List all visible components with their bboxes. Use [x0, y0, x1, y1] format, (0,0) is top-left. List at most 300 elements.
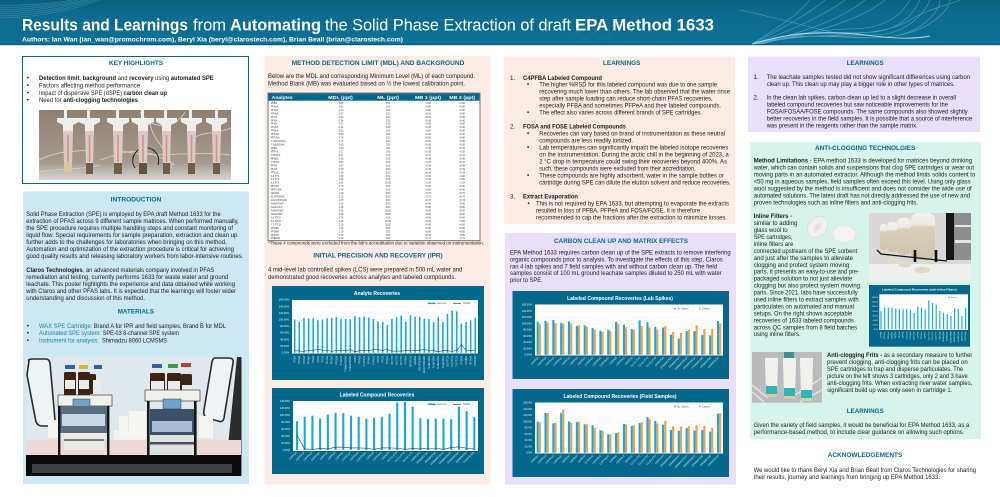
text: anti-clogging frits: prevent clogging, anti-clogging frits can be placed on [827, 359, 968, 366]
table: MDL results: <0.80 [425, 144, 432, 146]
table: MDL results: 5.00 [386, 197, 391, 199]
chart: analyte recoveries: NFDHA [470, 356, 472, 365]
chart: inline filter recoveries: 0.00% [873, 329, 879, 331]
chart: inline filter recoveries: C2-8:2 FTS [936, 332, 938, 340]
table: MDL results: 2.00 [386, 235, 391, 237]
chart: analyte recoveries: PFDA [321, 356, 324, 363]
chart: inline filter recoveries: D3NMeFOSAA [949, 331, 952, 343]
learning 2: FOSA and FOSE: • [527, 131, 529, 138]
table: MDL results: <0.76 [459, 192, 466, 195]
table: MDL results: <0.40 [459, 119, 466, 122]
chart: labeled compound recoveries: 60.00% [281, 427, 291, 431]
highlights list [27, 75, 214, 104]
materials list: Instrument for analysis: [39, 338, 99, 345]
table: MDL results: 1.70 [339, 193, 344, 195]
chart: analyte recoveries: PFMPA [460, 356, 463, 364]
chart: analyte recoveries: 6:2 FTS [396, 356, 398, 365]
chart: labeled compound recoveries: C3PFHxS [373, 451, 383, 462]
materials list: • [27, 338, 29, 345]
table: MDL results: 10.00 [385, 183, 392, 185]
learning 2: FOSA and FOSE: 2 °C drop in temperature could swing their recoveries beyond 400%. As [539, 159, 727, 166]
table: MDL results: MB 2 (ppt) [449, 95, 476, 100]
chart: labeled compound recoveries: C4PFHpA [311, 451, 321, 462]
chart: analyte recoveries: 11Cl-PF3OUdS [423, 356, 426, 373]
table: MDL results: <0.39 [459, 171, 466, 174]
table: MDL results: <0.80 [425, 227, 432, 230]
chart: analyte recoveries: T-PFHxS [363, 356, 366, 366]
heading: learnings: LEARNINGS [847, 60, 884, 67]
chart: labeled compound recoveries: D3NMeFOSA [416, 451, 429, 465]
table: MDL results: 0.75 [339, 235, 344, 237]
chart: labeled compound recoveries: C2-4:2 FTS [387, 451, 398, 463]
table: MDL results: <4.00 [425, 223, 432, 226]
chart: labeled compound recoveries: C5PFPeA [295, 451, 306, 462]
chart: field samples: 140.0% [523, 407, 533, 411]
table: MDL results: 2.00 [386, 162, 391, 164]
table: MDL results: PFDS [271, 169, 278, 171]
materials list: SPE-03 8-channel SPE system [103, 330, 179, 337]
chart: analyte recoveries: 60.00% [280, 331, 290, 335]
text: inline filters: setups. On the right shows acceptable [754, 310, 853, 317]
chart: labeled compound recoveries: 40.00% [281, 434, 291, 438]
table: MDL results: 1.88 [339, 179, 344, 181]
learning 3: extract evaporation: recommended to cap the fractions after the extraction to minimize losses. [536, 215, 727, 222]
chart: analyte recoveries: 120.00% [279, 311, 290, 315]
chart: field samples: D7NMeFOSE [691, 454, 704, 468]
learning 2: FOSA and FOSE: 2. [510, 124, 515, 131]
table: MDL results: <0.80 [425, 123, 432, 126]
table: MDL results: <0.40 [459, 185, 466, 188]
chart: lab spikes: 160.00% [522, 303, 533, 307]
text: introduction paragraph 1: further adds to the challenges for laboratories when bringing on this method. [26, 239, 227, 246]
table: MDL results: 0.75 [339, 186, 344, 188]
table: MDL results: <0.39 [459, 168, 466, 171]
chart: inline filter recoveries: C8PFOS [925, 332, 927, 338]
chart: inline filter recoveries: C2-6:2 FTS [932, 332, 934, 340]
table: MDL results: PFPeS [271, 152, 279, 154]
materials list: Shimadzu 8060 LCMSMS [102, 338, 167, 345]
table: MDL results: 5.00 [386, 179, 391, 181]
chart: analyte recoveries: 3:3 FTCA [446, 356, 449, 367]
chart: analyte recoveries: 7:3 FTCA [456, 356, 459, 367]
chart: field samples: D5NEtFOSAA [683, 454, 696, 468]
chart: analyte recoveries: PFTrDA [335, 356, 338, 365]
materials list: • [27, 330, 29, 337]
chart: lab spikes: C2-6:2 FTS [638, 356, 649, 368]
table: MDL results: MB 1 (ppt) [415, 95, 442, 100]
heading: MDL: METHOD DETECTION LIMIT (MDL) AND BACKGROUND [292, 60, 465, 67]
text: method limitations: proven technologies such as inline filters and anti-clogging frits. [754, 200, 918, 207]
learning 1: C4PFBA: The effect also varies across different brands of SPE cartridges. [539, 110, 702, 117]
table: MDL results: <0.80 [459, 216, 466, 219]
chart: labeled compound recoveries: Labeled Compound Recoveries [340, 392, 415, 398]
table: MDL results: 0.79 [339, 138, 344, 140]
highlights list: • [27, 75, 29, 82]
learning 3: extract evaporation: • [528, 201, 530, 208]
table: MDL results: 2.00 [386, 141, 391, 143]
table: MDL results: 0.29 [339, 169, 344, 171]
chart: field samples: D3NMeFOSAA [674, 454, 689, 469]
table: MDL results: <0.80 [459, 130, 466, 133]
title: the Solid Phase Extraction of draft [325, 17, 572, 35]
table: MDL results: <0.80 [459, 227, 466, 230]
learning 2: FOSA and FOSE: FOSA and FOSE Labeled Compounds [523, 124, 627, 131]
heading: IPR: INITIAL PRECISION AND RECOVERY (IPR) [313, 253, 443, 260]
chart: lab spikes: C4PFBA [530, 356, 540, 366]
chart: labeled compound recoveries: C7PFUnA [342, 451, 352, 462]
chart: inline filter recoveries: 100.00% [872, 306, 879, 308]
table: MDL results: <0.37 [425, 154, 432, 157]
chart: analyte recoveries: Analyte Recoveries [354, 291, 400, 297]
chart: analyte recoveries: Recovery [437, 302, 448, 305]
table: MDL results: NFDHA [271, 234, 279, 237]
learning item 2: FOSA/FOSAA/FOSE compounds. The same compounds also showed slightly [767, 108, 969, 115]
table: MDL results: <0.80 [459, 230, 466, 233]
table: MDL results: 10.00 [385, 221, 392, 223]
table: MDL results: 1.52 [339, 176, 344, 178]
chart: labeled compound recoveries: D5NEtFOSAA [439, 451, 452, 465]
table: MDL results: <0.38 [425, 164, 432, 167]
chart: analyte recoveries: PFOA [312, 356, 315, 363]
table: MDL results: <8.00 [425, 210, 432, 212]
chart: labeled compound recoveries: %RSD [463, 403, 470, 406]
table: MDL results: PFTeDA [271, 137, 280, 140]
table: MDL results: 11Cl-PF3OUdS [271, 200, 287, 202]
chart: analyte recoveries: T-PFOS [372, 356, 375, 365]
chart: field samples: Labeled Compound Recoveries (Field Samples) [563, 394, 677, 400]
table: MDL results: <4.00 [425, 220, 432, 223]
chart: lab spikes: D3NMeFOSA [660, 356, 673, 370]
table: MDL results: PFHpS [271, 158, 279, 160]
highlights list: Factors affecting method performance [39, 82, 141, 90]
table: MDL results: ML (ppt) [377, 95, 400, 100]
chart: analyte recoveries: PFHxA [303, 356, 306, 364]
table: MDL results: <0.76 [459, 199, 466, 202]
chart: inline filter recoveries: Recovery [951, 296, 958, 299]
panel: carbon clean up and matrix effects [505, 233, 736, 484]
learning item 2 [754, 94, 973, 129]
chart: field samples: 40.0% [525, 438, 533, 442]
table: MDL results: 1.18 [339, 231, 344, 233]
learning 1: C4PFBA: step after sample loading can reduce short-chain PFAS recoveries, [539, 96, 713, 103]
table: MDL results: <0.80 [459, 234, 466, 237]
text: inline filters: clogging and protect system moving [754, 262, 850, 269]
chart: analyte recoveries: 160.00% [279, 298, 290, 302]
panel: key highlights [22, 56, 248, 184]
table: MDL results: N-EtFOSE* [271, 213, 283, 216]
heading: materials: MATERIALS [118, 309, 155, 316]
materials list: • [27, 323, 29, 330]
text: IPR description: 4 mid-level lab controlled spikes (LCS) were prepared in 500 mL water and [268, 267, 463, 274]
chart: labeled compound recoveries: C2PFTeDA [356, 451, 367, 463]
text: introduction paragraph 1: liquid flow. Special requirements for sample preparation, extraction and clean up [26, 232, 238, 239]
chart: inline filter recoveries: C4PFHpA [890, 331, 894, 339]
table: MDL results: <0.80 [425, 202, 432, 206]
chart: analyte recoveries: 5:3 FTCA [451, 356, 454, 367]
highlights list: Detection limit, background and recovery using automated SPE [39, 75, 214, 82]
panel: introduction and materials [23, 192, 249, 484]
heading: key highlights: KEY HIGHLIGHTS [109, 60, 164, 67]
table: MDL results: 5.00 [386, 190, 391, 192]
table: MDL results: 2.00 [386, 148, 391, 150]
chart: field samples: D3NMeFOSA [660, 454, 673, 468]
text: introduction paragraph 2: remediation and testing, currently performs 1633 for waste water and ground [26, 274, 229, 281]
learning 1: C4PFBA: C4PFBA Labeled Compound [523, 75, 602, 82]
table: MDL results: <0.80 [459, 137, 466, 140]
chart: labeled compound recoveries: C4PFBA [289, 451, 298, 461]
chart: lab spikes: C4PFHpA [553, 356, 563, 367]
chart: analyte recoveries: PFBS [354, 356, 357, 363]
table: MDL results: 1.87 [339, 200, 344, 202]
chart: field samples: 160.0% [523, 401, 533, 405]
chart: labeled compound recoveries: D9NEtFOSE [455, 451, 468, 464]
text: method limitations: <50 mg in aqueous samples, field samples often exceed this level. Using only glass [754, 179, 971, 186]
chart: analyte recoveries: 140.00% [279, 304, 290, 308]
learning 3: extract evaporation: This is not required by EPA 1633, but attempting to evaporate the extracts [536, 201, 729, 208]
chart: labeled compound recoveries: C8PFOA [319, 451, 329, 461]
table: MDL results: 5.00 [386, 200, 391, 202]
chart: labeled compound recoveries: C9PFNA [327, 451, 337, 461]
table: MDL results: 4:2 FTS [271, 176, 280, 178]
chart: field samples: C4PFBA [530, 454, 540, 464]
table: MDL results: 20.00 [385, 210, 392, 212]
table: MDL results: 5.00 [386, 207, 391, 209]
highlights list: Need for anti-clogging technologies [39, 97, 139, 104]
text: anti-clogging frits: Anti-clogging Frits - as a secondary measure to further [827, 352, 972, 359]
chart: analyte recoveries: T-NEtFOSAA [349, 356, 352, 371]
chart: labeled compound recoveries: C6PFDA [335, 451, 344, 461]
table: MDL results: <0.80 [425, 109, 432, 112]
table: MDL results: 5.42 [339, 210, 344, 212]
text: method limitations: moving parts in an automated extractor. Although the method limits solids content to [754, 172, 976, 179]
chart: analyte recoveries: 9Cl-PF3ONS [419, 356, 422, 371]
table: MDL results: 0.71 [339, 152, 344, 154]
chart: analyte recoveries: PFMBA [465, 356, 468, 365]
chart: labeled compound recoveries: C2-6:2 FTS [394, 451, 406, 463]
learning 2: FOSA and FOSE [510, 124, 731, 187]
chart: labeled compound recoveries: C5PFHxA [303, 451, 313, 462]
table: MDL results: 2.00 [386, 117, 391, 119]
table: MDL results: PFHpA [271, 112, 279, 115]
table: MDL results: <0.40 [425, 126, 432, 129]
table: MDL results: 2.00 [386, 124, 391, 126]
chart: analyte recoveries: 40.00% [280, 337, 290, 341]
panel: learnings (right) [748, 56, 980, 132]
text: method limitations: water, which can contain solids and suspensions that clog SPE cartridges or wear out [753, 165, 974, 172]
table: MDL results: 2.00 [386, 127, 391, 129]
text: inline filters: recoveries of 1633 labeled compounds [754, 317, 854, 324]
table: MDL results: 3.45 [339, 221, 344, 223]
table: MDL results: <8.00 [459, 213, 466, 216]
text: method limitations: automated solutions. The latest draft has not directly addressed the use of new and [754, 193, 971, 200]
chart: analyte recoveries: 20.00% [280, 344, 290, 348]
chart: analyte recoveries: HFPO-DA [409, 356, 412, 367]
table: MDL results: 2.00 [386, 152, 391, 154]
chart: lab spikes: C5PFHxA [545, 356, 555, 367]
table: MDL results: PFDoS [271, 172, 279, 174]
table: MDL results: 2.00 [386, 138, 391, 140]
table: MDL results: PFUnA [271, 126, 279, 129]
chart: lab spikes: C7PFUnA [584, 356, 595, 367]
chart: labeled compound recoveries: 100.00% [280, 413, 291, 417]
chart: field samples: D5NEtFOSA [668, 454, 681, 467]
heading: introduction: INTRODUCTION [111, 196, 162, 204]
chart: analyte recoveries: %RSD [463, 302, 470, 305]
chart: analyte recoveries: PFPeA [298, 356, 301, 364]
text: anti-clogging frits: significant build up was only seen in cartridge 1. [827, 387, 953, 394]
table: MDL results: <0.40 [425, 185, 432, 188]
title: EPA Method 1633 [575, 17, 714, 35]
text: carbon description: samples consist of 100 mL ground leachate samples diluted to 250 mL with water [510, 270, 722, 277]
table: MDL results: 0.53 [339, 158, 344, 160]
table: MDL results: PFOA [271, 116, 278, 119]
table: MDL results: <0.80 [425, 137, 432, 140]
learning item 1 [754, 74, 971, 88]
heading: learnings: LEARNINGS [603, 60, 641, 67]
chart: lab spikes: C2-4:2 FTS [630, 356, 642, 368]
table: MDL results: MDL (ppt) [328, 95, 353, 100]
chart: field samples: C2PFTeDA [599, 454, 610, 466]
table: MDL results: <0.76 [425, 199, 432, 202]
header banner [0, 0, 1000, 45]
chart: labeled compound recoveries: 120.00% [280, 406, 291, 410]
icon: inline filter discs [803, 212, 856, 242]
text: carbon description: EPA Method 1633 requires carbon clean up of the SPE extracts to remove interfering [510, 249, 731, 256]
table: MDL results: <0.76 [425, 192, 432, 195]
chart: inline filter recoveries: D5NEtFOSA [946, 331, 949, 341]
text: IPR description [268, 267, 463, 281]
title: from [193, 17, 226, 35]
text: introduction paragraph 1: Automation and optimization of the extraction procedure is critical for achieving [26, 246, 235, 253]
highlights list: • [27, 90, 29, 97]
table: MDL results: 0.44 [339, 127, 344, 129]
table: MDL results: <0.37 [425, 161, 432, 164]
table: MDL results: <1.52 [425, 178, 432, 181]
table: MDL results: 2.00 [386, 113, 391, 115]
chart: analyte recoveries: PFTeDA [340, 356, 343, 365]
chart: lab spikes: 0.00% [525, 353, 533, 357]
chart: lab spikes: D5NEtFOSA [668, 356, 681, 369]
table: MDL results: 3.85 [339, 103, 344, 105]
learning 3: extract evaporation: 3. [510, 194, 515, 201]
panel: anti-clogging technologies [750, 142, 981, 439]
table: MDL results: <0.80 [459, 202, 466, 206]
table: MDL results: PFPeA [271, 105, 279, 108]
chart: analyte recoveries: N-EtFOSA [432, 356, 436, 368]
table: MDL results: 2.00 [386, 158, 391, 160]
table: MDL results: 5.00 [386, 204, 391, 206]
chart: lab spikes: C8PFOSA [654, 356, 665, 367]
chart: analyte recoveries: 0.00% [282, 351, 290, 355]
table: MDL results: <0.80 [459, 189, 466, 192]
chart: lab spikes: C8PFOS [624, 356, 634, 366]
chart: field samples: C8PFOA [562, 454, 571, 464]
panel: method detection limit and IPR [264, 56, 490, 484]
text: anti-clogging learnings: Given the variety of field samples, it would be beneficial for EPA Method 1633, as a [754, 422, 970, 429]
chart: labeled compound recoveries: D3NMeFOSAA [430, 451, 444, 466]
learning item 1: 1. [754, 74, 759, 81]
text: introduction paragraph 1: the SPE procedure requires multiple handling steps and constant monitoring of [26, 225, 233, 232]
chart: field samples: 60.0% [525, 432, 533, 436]
table: MDL results: <0.80 [459, 140, 466, 143]
table: MDL results: PFOSA [271, 185, 279, 188]
table: MDL results: <0.38 [459, 157, 466, 160]
chart: lab spikes: D9NEtFOSE [700, 356, 712, 369]
table: MDL results: N-MeFOSA* [271, 202, 284, 206]
chart: labeled compound recoveries: C3PFBS [366, 451, 375, 461]
table: MDL results: 1.14 [339, 207, 344, 209]
learning 1: C4PFBA: • [527, 110, 529, 117]
chart: field samples: C3HFPO-DA [707, 454, 720, 467]
table: MDL results: T-NMeFOSAA [271, 140, 286, 143]
learning 1: C4PFBA: recovering much lower than others. The lab observed that the water rinse [539, 89, 731, 96]
table: MDL results: <0.80 [459, 123, 466, 126]
text: carbon description: prior to SPE. [510, 277, 543, 284]
table: MDL results: <0.80 [425, 206, 432, 209]
chart: field samples: 80.0% [525, 426, 533, 430]
learning item 2: labeled compound recoveries but saw noticeable improvements for the [767, 101, 949, 108]
table footnote: *These 4 compounds were excluded from the lab's accreditation due to variation observed on instrumentation. [268, 241, 484, 246]
text: introduction paragraph 1 [26, 211, 244, 260]
table: MDL results: <0.38 [425, 157, 432, 160]
chart: field samples: C5PFPeA [537, 454, 547, 465]
chart: lab spikes: 140.00% [522, 309, 533, 313]
chart: analyte recoveries: PFDoS [386, 356, 389, 364]
table: MDL results: 0.75 [339, 141, 344, 143]
chart: lab spikes: C3HFPO-DA [707, 356, 720, 369]
table: MDL results: <0.40 [459, 133, 466, 136]
heading: anti-clogging: ANTI-CLOGGING TECHNOLGIES [815, 145, 916, 152]
chart: analyte recoveries: N-EtFOSE [442, 356, 445, 368]
chart: labeled compound recoveries: 0.00% [283, 448, 291, 452]
chart: lab spikes: C2PFTeDA [599, 356, 610, 368]
table: MDL results: 5.00 [386, 238, 391, 240]
chart: labeled compound recoveries: C8PFOS [381, 451, 390, 461]
chart: lab spikes: 60.00% [523, 334, 533, 338]
chart: lab spikes: C2PFDoA [592, 356, 602, 367]
table: MDL results: <0.40 [425, 119, 432, 122]
photo: automated SPE systems [26, 357, 242, 476]
table: MDL results: <0.40 [425, 133, 432, 136]
table: MDL results: 5.66 [339, 214, 344, 216]
table: MDL results: 2.00 [386, 131, 391, 133]
chart: inline filter recoveries: C2PFTeDA [913, 331, 916, 340]
chart: inline filter recoveries: 40.00% [873, 320, 879, 322]
chart: analyte recoveries: PFPeS [358, 356, 361, 364]
chart: inline filter recoveries: C9PFNA [898, 331, 901, 338]
chart: inline filter recoveries: 60.00% [873, 315, 879, 317]
text: anti-clogging frits: picture on the left shows 3 cartridges, only 2 and 3 have [827, 373, 968, 380]
learning item 2: better recoveries in the field samples. It is possible that a source of interference [767, 115, 973, 122]
table: MDL results: <0.71 [459, 237, 466, 240]
table: MDL results: <4.00 [459, 220, 466, 223]
learning 3: extract evaporation [510, 194, 729, 222]
learning 1: C4PFBA: • [527, 82, 529, 89]
text: inline filters [754, 213, 861, 338]
table: MDL results: 0.52 [339, 131, 344, 133]
table: MDL results: T-PFHxS [271, 155, 281, 157]
chart: lab spikes: 20.00% [523, 346, 533, 350]
chart: labeled compound recoveries: C8PFOSA [411, 451, 421, 462]
table: MDL results: 5.00 [386, 103, 391, 105]
table: MDL results: PFHxA [271, 109, 279, 112]
table: MDL results: N-EtFOSA* [271, 206, 283, 209]
table: MDL results: PFNS [271, 165, 278, 167]
chart: lab spikes: Carbon [702, 308, 711, 311]
table: MDL results: 2.00 [386, 169, 391, 171]
table: MDL results: PFDA [271, 123, 278, 126]
chart: inline filter recoveries: C3PFHxS [921, 332, 923, 339]
